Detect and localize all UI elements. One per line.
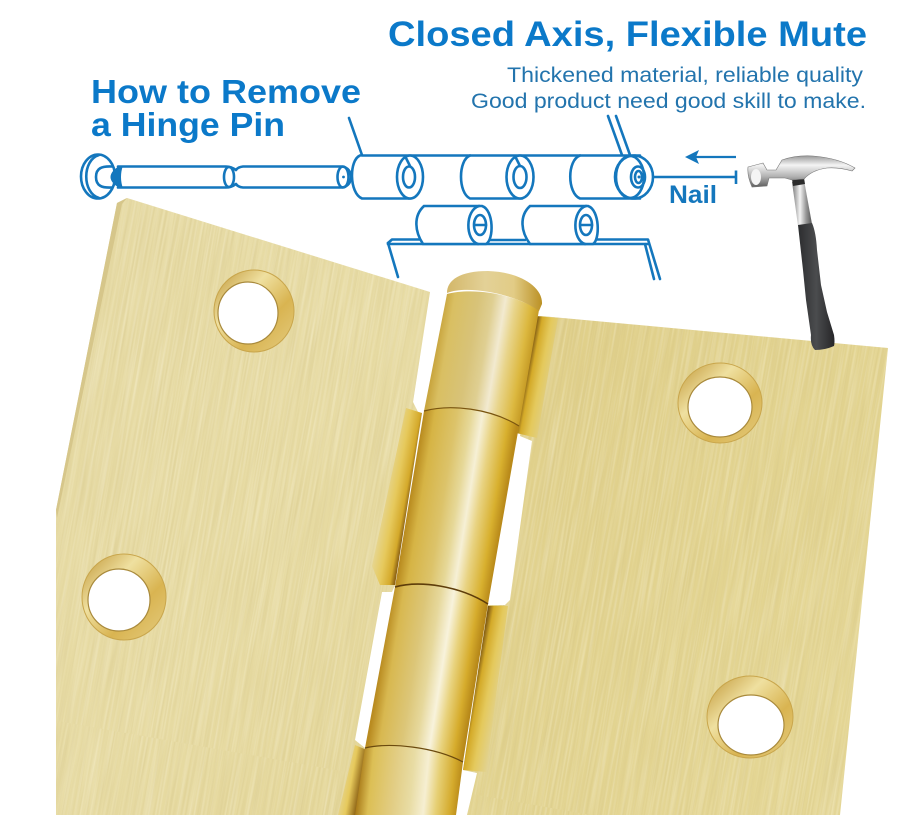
heading: how to remove a hinge pin bbox=[91, 73, 361, 143]
hammer collar bbox=[792, 178, 805, 186]
hinge barrel bbox=[355, 271, 542, 815]
left leaf flange lower bbox=[338, 745, 367, 815]
barrel fourth knuckle bbox=[355, 746, 463, 815]
left hinge leaf bbox=[56, 198, 430, 815]
screw hole top right bbox=[678, 363, 762, 443]
screw hole bottom left bbox=[82, 554, 166, 640]
barrel top knuckle bbox=[424, 291, 539, 426]
left leaf flange upper bbox=[372, 408, 422, 585]
right leaf flange lower bbox=[463, 606, 508, 772]
subtitle line one: Thickened material, reliable quality bbox=[507, 63, 863, 87]
diagram: exploded hinge pin bbox=[81, 116, 736, 279]
heading: how to remove a hinge pin: a Hinge Pin bbox=[91, 106, 285, 143]
nail label: Nail bbox=[669, 181, 717, 209]
arrow bbox=[685, 150, 736, 164]
barrel third knuckle bbox=[365, 584, 488, 762]
heading: how to remove a hinge pin: How to Remove bbox=[91, 73, 361, 110]
screw hole top left bbox=[214, 270, 294, 352]
lower knuckles and leaf bbox=[388, 206, 660, 279]
hammer head bbox=[748, 156, 855, 187]
pin cap bbox=[447, 271, 542, 311]
subtitle line two: Good product need good skill to make. bbox=[471, 89, 866, 113]
right hinge leaf bbox=[463, 316, 888, 815]
hammer grip bbox=[798, 223, 834, 350]
icon: hammer bbox=[748, 156, 855, 350]
nail line bbox=[653, 170, 736, 184]
barrel second knuckle bbox=[395, 408, 519, 604]
title: closed axis: Closed Axis, Flexible Mute bbox=[388, 15, 867, 54]
right leaf flange upper bbox=[512, 316, 558, 438]
hammer shaft bbox=[792, 180, 812, 226]
screw hole bottom right bbox=[707, 676, 793, 758]
upper knuckles bbox=[349, 116, 653, 198]
pin bbox=[81, 154, 351, 198]
